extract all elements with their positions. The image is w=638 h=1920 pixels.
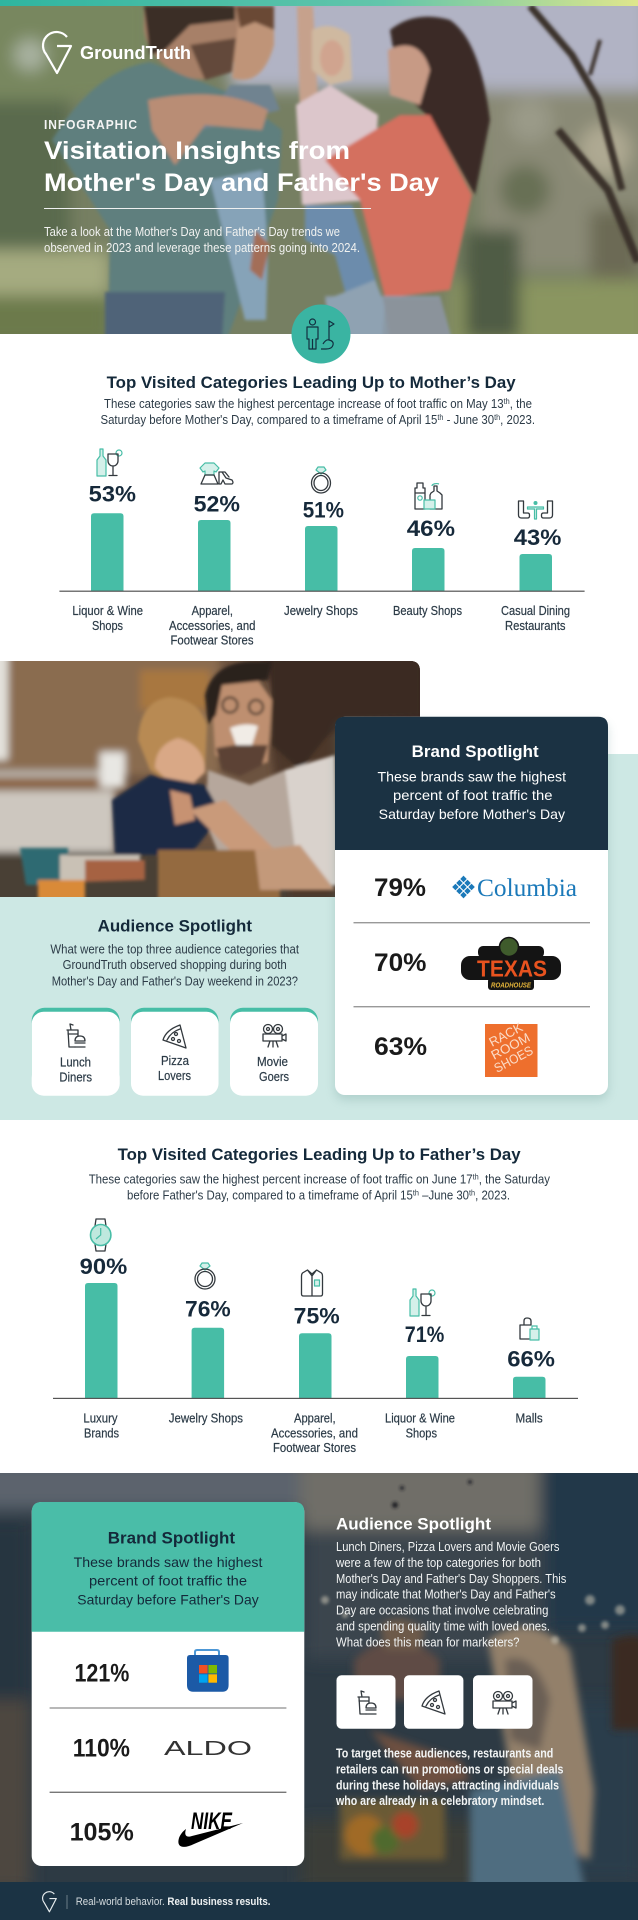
label: Apparel, Accessories and Footwear: Accessories, and: [169, 619, 256, 633]
label: Jewelry Shops: Jewelry Shops: [284, 604, 358, 618]
icon: ring: [195, 1263, 215, 1289]
hero description: Take a look at the Mother's Day and Father's Day trends we: [44, 225, 340, 239]
description: , 2023.: [475, 1188, 510, 1202]
value: 53%: 53%: [89, 482, 136, 507]
description: percent of foot traffic the: [393, 787, 553, 803]
bar chart: Father's Day categories: [53, 1219, 578, 1455]
heading: Brand Spotlight: [412, 743, 539, 761]
bar: Liquor and Wine 53%: [91, 513, 124, 591]
label: Malls: Malls: [516, 1412, 543, 1426]
hero banner: [0, 0, 638, 350]
label: Casual Dining Restaurants: [501, 604, 570, 633]
icon: dining table and chairs: [518, 501, 552, 519]
heading: Audience Spotlight: [98, 918, 253, 936]
description: [378, 769, 566, 822]
description: [89, 1172, 551, 1202]
icon: wine bottle and glass: [97, 449, 122, 476]
description: th: [473, 1172, 479, 1181]
bold paragraph: To target these audiences, restaurants and: [336, 1746, 553, 1760]
paragraph: [335, 1540, 566, 1650]
description: , 2023.: [500, 413, 535, 427]
description: These brands saw the highest: [74, 1554, 263, 1570]
description: These categories saw the highest percentage increase of foot traffic on May 13: [104, 397, 541, 411]
label: Apparel, Accessories and Footwear: [271, 1412, 358, 1455]
card body: [335, 717, 608, 1095]
label: Apparel, Accessories and Footwear: Apparel,: [294, 1412, 336, 1426]
icon: beauty products: [415, 483, 442, 509]
paragraph: Mother's Day and Father's Day Shoppers. This: [336, 1572, 566, 1586]
description: GroundTruth observed shopping during both: [63, 958, 287, 972]
hero photo: family playing outdoors: [0, 0, 638, 350]
description: Saturday before Father's Day: [77, 1591, 259, 1607]
bold paragraph: retailers can run promotions or special deals: [336, 1762, 564, 1776]
paragraph: were a few of the top categories for both: [335, 1556, 541, 1570]
card: pizza icon: [404, 1675, 463, 1729]
icon: wristwatch: [90, 1219, 111, 1251]
label: Apparel, Accessories and Footwear: [169, 604, 256, 648]
description: th: [494, 413, 500, 422]
logo: Texas Roadhouse: ROADHOUSE: [491, 980, 532, 990]
value: 110%: 110%: [73, 1734, 130, 1762]
value: 76%: 76%: [185, 1297, 231, 1322]
icon: drink and burger: [67, 1024, 85, 1047]
value: 105%: 105%: [70, 1819, 134, 1847]
hero title: [44, 137, 439, 197]
description: th: [504, 397, 510, 406]
label: Lovers: [158, 1069, 191, 1083]
label: Luxury Brands: [83, 1412, 119, 1440]
value: 46%: 46%: [407, 516, 455, 541]
heading: Brand Spotlight: [108, 1529, 236, 1547]
description: These brands saw the highest: [378, 769, 566, 785]
bar chart: Mother's Day categories: [59, 449, 585, 648]
mint background band: [0, 754, 638, 1120]
card: lunch icon: [336, 1675, 396, 1729]
icon: film camera: [263, 1024, 286, 1047]
label: Jewelry Shops: Jewelry Shops: [169, 1412, 243, 1426]
hero title: Mother's Day and Father's Day: [44, 169, 439, 197]
description: Saturday before Mother's Day: [379, 806, 565, 822]
description: - June 30: [443, 413, 494, 427]
heading: Top Visited Categories Leading Up to Mother’s Day: [107, 374, 516, 392]
label: Liquor and Wine Shops: Liquor & Wine: [72, 604, 143, 618]
value: 52%: 52%: [194, 492, 240, 517]
value: 79%: 79%: [374, 874, 426, 902]
logo: Nike: [178, 1808, 243, 1847]
paragraph: and spending quality time with loved ones.: [336, 1620, 550, 1634]
restaurant photo: friends dining outdoors: [0, 1460, 638, 1890]
logo: Rack Room Shoes: [485, 1019, 538, 1077]
eyebrow: infographic: INFOGRAPHIC: [44, 117, 138, 132]
panel: audience spotlight text on photo: [335, 1515, 566, 1808]
description: th: [413, 1188, 419, 1197]
label: [158, 1054, 191, 1083]
logo: Nike: NIKE: [191, 1808, 233, 1835]
label: Luxury Brands: Luxury: [83, 1412, 118, 1426]
label: Diners: [59, 1071, 92, 1085]
logo: Columbia: Columbia: [477, 875, 577, 902]
bar: Casual Dining 43%: [520, 554, 552, 591]
description: [74, 1554, 263, 1607]
value: 90%: 90%: [80, 1254, 127, 1279]
value: 63%: 63%: [374, 1033, 427, 1061]
logo: Texas Roadhouse: [461, 938, 561, 990]
bar: Apparel 75%: [299, 1333, 332, 1398]
paragraph: may indicate that Mother's Day and Father's: [336, 1588, 556, 1602]
panel: audience spotlight: [32, 918, 318, 1096]
description: Saturday before Mother's Day, compared to a timeframe of April 15: [100, 413, 470, 427]
icon: shirt: [302, 1270, 322, 1296]
description: , the: [510, 397, 532, 411]
paragraph: What does this mean for marketers?: [336, 1636, 520, 1650]
description: before Father's Day, compared to a timeframe of April 15: [127, 1188, 440, 1202]
description: [100, 397, 535, 427]
label: Liquor and Wine Shops: Liquor & Wine: [385, 1412, 455, 1426]
description: Mother's Day and Father's Day weekend in 2023?: [52, 974, 298, 988]
icon: ring: [312, 467, 330, 493]
bar: Jewelry 51%: [305, 526, 338, 591]
label: Pizza: [161, 1054, 189, 1068]
card: Pizza Lovers: [131, 1008, 218, 1096]
bar: Beauty 46%: [412, 548, 444, 591]
description: These categories saw the highest percent increase of foot traffic on June 17: [89, 1172, 508, 1186]
label: Liquor and Wine Shops: Shops: [92, 619, 123, 633]
label: Liquor and Wine Shops: [385, 1412, 455, 1440]
icon: pizza slice: [163, 1025, 186, 1048]
panel: Mother's Day brand spotlight: [335, 717, 608, 1100]
logo wordmark: GroundTruth: [80, 43, 191, 63]
bar: Malls 66%: [513, 1377, 546, 1398]
label: Apparel, Accessories and Footwear: Apparel,: [192, 604, 233, 618]
icon: shopping bag: [520, 1318, 539, 1340]
value: 43%: 43%: [514, 525, 561, 550]
icon: dress and heels: [200, 463, 233, 484]
description: , the Saturday: [479, 1172, 551, 1186]
paragraph: Day are occasions that involve celebrating: [336, 1604, 548, 1618]
label: Luxury Brands: Brands: [84, 1426, 119, 1440]
logo: Rack Room Shoes: ROOM: [488, 1030, 532, 1063]
footer logo mark: [43, 1892, 56, 1912]
description: –June 30: [419, 1188, 469, 1202]
label: Liquor and Wine Shops: Shops: [406, 1426, 437, 1440]
bar: Apparel 52%: [198, 520, 230, 591]
bold paragraph: [335, 1746, 564, 1808]
label: Movie: [257, 1055, 288, 1069]
label: Casual Dining Restaurants: Casual Dining: [501, 604, 570, 618]
bar: Luxury Brands 90%: [85, 1283, 118, 1398]
bold paragraph: during these holidays, attracting individuals: [336, 1778, 559, 1792]
heading: Top Visited Categories Leading Up to Father’s Day: [118, 1146, 521, 1164]
hero description: [44, 225, 360, 255]
value: 66%: 66%: [507, 1346, 555, 1371]
section: Father's Day top categories: [53, 1146, 578, 1455]
heading: Audience Spotlight: [336, 1515, 492, 1533]
label: Casual Dining Restaurants: Restaurants: [505, 619, 566, 633]
section: Mother's Day top categories: [59, 374, 585, 648]
label: Goers: [259, 1070, 289, 1084]
card header: [32, 1502, 304, 1632]
logo: ALDO: ALDO: [164, 1737, 252, 1760]
description: percent of foot traffic the: [89, 1573, 247, 1589]
label: Lunch: [60, 1056, 91, 1070]
card body: [32, 1502, 304, 1866]
hero title: Visitation Insights from: [44, 137, 350, 165]
description: [50, 942, 299, 988]
footer tagline: Real-world behavior. Real business results.: [76, 1896, 270, 1908]
bold paragraph: who are already in a celebratory mindset.: [335, 1794, 544, 1808]
card header: [335, 717, 608, 850]
value: 70%: 70%: [374, 949, 426, 977]
logo: Rack Room Shoes: SHOES: [491, 1043, 536, 1076]
value: 121%: 121%: [74, 1660, 129, 1688]
bar: Jewelry Shops 76%: [192, 1328, 224, 1398]
paragraph: Lunch Diners, Pizza Lovers and Movie Goers: [336, 1540, 559, 1554]
panel: Father's Day brand spotlight: [32, 1502, 304, 1866]
label: Apparel, Accessories and Footwear: Footwear Stores: [273, 1441, 356, 1455]
kitchen photo: father and son laughing: [0, 661, 420, 897]
value: 51%: 51%: [303, 498, 344, 523]
description: th: [437, 413, 443, 422]
label: Liquor and Wine Shops: [72, 604, 143, 633]
icon: wine bottle and glass: [410, 1289, 435, 1316]
label: [59, 1056, 92, 1085]
label: [257, 1055, 289, 1084]
card: Movie Goers: [230, 1008, 318, 1096]
logo: GroundTruth: [43, 32, 191, 73]
logo: Rack Room Shoes: RACK: [486, 1019, 525, 1050]
card: camera icon: [473, 1675, 532, 1729]
card: Lunch Diners: [32, 1008, 120, 1096]
logo: Microsoft Store: [187, 1650, 229, 1692]
value: 75%: 75%: [294, 1304, 340, 1329]
label: Beauty Shops: Beauty Shops: [393, 604, 462, 618]
value: 71%: 71%: [405, 1322, 444, 1347]
bar: Liquor and Wine 71%: [406, 1356, 438, 1398]
top gradient bar: [0, 0, 638, 6]
footer bar: [0, 1882, 638, 1920]
description: What were the top three audience categories that: [50, 942, 299, 956]
label: Apparel, Accessories and Footwear: Accessories, and: [271, 1426, 358, 1440]
icon: person and golf flag in teal circle: [292, 304, 350, 364]
hero description: observed in 2023 and leverage these patterns going into 2024.: [44, 241, 360, 255]
logo mark: location pin: [43, 32, 71, 73]
description: th: [469, 1188, 475, 1197]
logo: Texas Roadhouse: TEXAS: [477, 956, 547, 982]
label: Apparel, Accessories and Footwear: Footwear Stores: [170, 634, 254, 648]
